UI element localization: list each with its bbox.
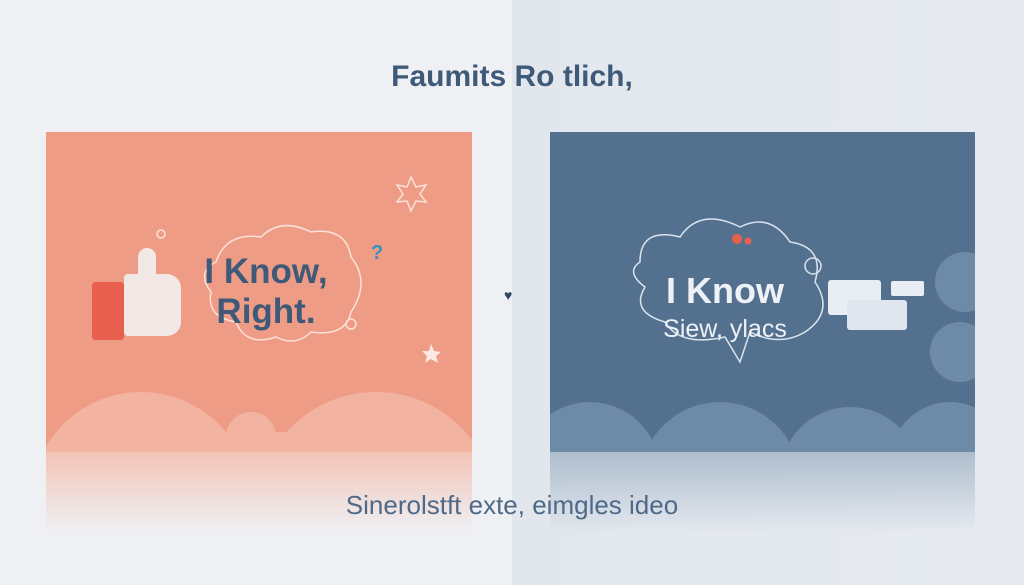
title: Faumits Ro tlich, bbox=[391, 60, 633, 93]
icon: chat bubbles bbox=[828, 280, 881, 315]
panel: left coral bbox=[46, 132, 472, 452]
cloud speech bubble bbox=[157, 226, 361, 341]
subtitle: Sinerolstft exte, eimgles ideo bbox=[346, 490, 678, 520]
text: I Know, Right: I Know, bbox=[204, 252, 328, 291]
text: I Know, Right: Right. bbox=[216, 292, 316, 331]
text: I Know Siew ylacs: I Know bbox=[666, 270, 784, 311]
icon: thumbs up bbox=[92, 282, 124, 340]
thought cloud outline bbox=[634, 219, 823, 362]
icon: question mark: ? bbox=[371, 242, 383, 264]
star bbox=[397, 177, 426, 211]
bottom clouds bbox=[31, 392, 496, 585]
heart: ♥ bbox=[504, 287, 512, 303]
reflection bbox=[46, 452, 472, 532]
text: I Know, Right bbox=[204, 252, 328, 331]
text: I Know Siew ylacs bbox=[663, 270, 787, 343]
text: I Know Siew ylacs: Siew, ylacs bbox=[663, 315, 787, 343]
panel: right blue bbox=[550, 132, 975, 452]
